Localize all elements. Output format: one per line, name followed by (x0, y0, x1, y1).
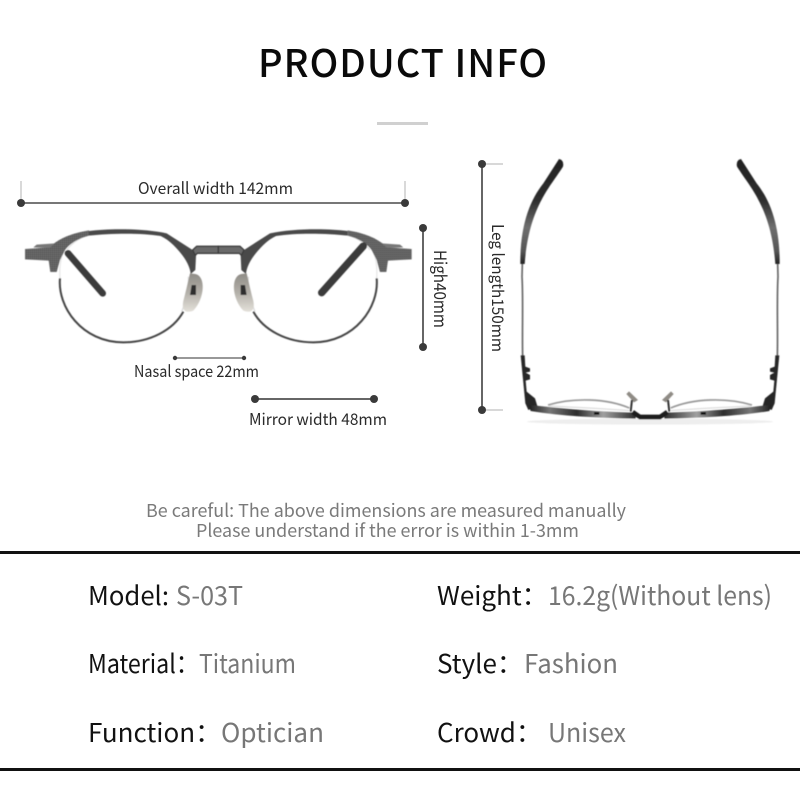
measurement disclaimer (146, 497, 627, 543)
right half of top view (662, 159, 780, 419)
spec: weight (437, 576, 772, 613)
spec: model: S-03T (176, 576, 243, 613)
height dimension: High40mm (429, 250, 454, 328)
spec: crowd (437, 713, 626, 750)
spec: style: Style： (437, 644, 523, 681)
mirror width dimension: Mirror width 48mm (249, 406, 387, 430)
glasses front view (25, 229, 412, 342)
left half of top view (520, 159, 638, 419)
height dimension (419, 224, 454, 351)
bottom divider (0, 768, 800, 771)
nasal space dimension: Nasal space 22mm (134, 358, 259, 382)
top view bridge (633, 412, 667, 417)
spec: style (437, 644, 618, 681)
title underline (377, 122, 428, 125)
glasses top view (520, 159, 780, 425)
spec: crowd: Crowd： (437, 713, 542, 750)
left half of front view (25, 229, 218, 342)
overall width dimension: Overall width 142mm (138, 175, 293, 199)
spec: weight: Weight： (437, 576, 548, 613)
spec: model (88, 576, 243, 613)
spec: material: Material： (88, 644, 199, 681)
leg length dimension: Leg length150mm (487, 224, 511, 352)
spec: material (88, 644, 296, 681)
spec: style: Fashion (524, 644, 618, 681)
spec: crowd: Unisex (548, 713, 626, 750)
spec: function: Optician (221, 713, 324, 750)
mirror width dimension (249, 395, 387, 430)
title: PRODUCT INFO (258, 33, 547, 88)
overall width dimension (17, 175, 409, 207)
top divider (0, 551, 800, 554)
spec: material: Titanium (199, 644, 296, 681)
spec: weight: 16.2g(Without lens) (548, 576, 772, 613)
shadow under frame (527, 419, 773, 425)
measurement disclaimer: Please understand if the error is within 1-3mm (196, 517, 579, 543)
spec: function: Function： (88, 713, 221, 750)
spec: function (88, 713, 324, 750)
measurement disclaimer: Be careful: The above dimensions are measured manually (146, 497, 627, 523)
right half of front view (218, 229, 412, 342)
leg length dimension (478, 160, 511, 414)
spec: model: Model: (88, 576, 169, 613)
